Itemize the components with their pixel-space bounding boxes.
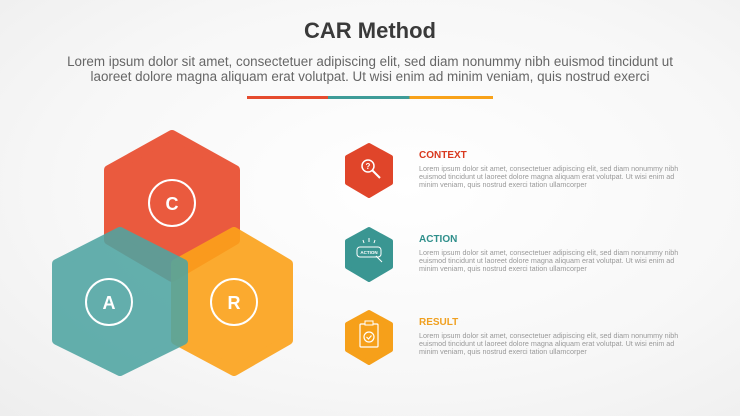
icon: context: ?	[366, 162, 371, 171]
hexagon R: R	[228, 293, 240, 313]
hexagon C: C	[166, 194, 178, 214]
text: result: Lorem ipsum dolor sit amet, consectetuer adipiscing elit, sed diam nonummy nibh euismod tincidunt ut laoreet dolore magna aliquam erat volutpat. Ut wisi enim ad minim veniam, quis nostrud exerci tation ullamcorper	[419, 331, 678, 356]
hexagon A	[57, 232, 183, 371]
text: context: Lorem ipsum dolor sit amet, consectetuer adipiscing elit, sed diam nonummy nibh euismod tincidunt ut laoreet dolore magna aliquam erat volutpat. Ut wisi enim ad minim veniam, quis nostrud exerci tation ullamcorper	[419, 164, 678, 189]
heading: context: CONTEXT	[419, 150, 467, 161]
divider line	[247, 96, 493, 99]
heading: result: RESULT	[419, 317, 458, 328]
heading: action: ACTION	[419, 234, 457, 245]
icon: action	[347, 229, 391, 280]
hexagon A: A	[102, 293, 116, 313]
text: action: Lorem ipsum dolor sit amet, consectetuer adipiscing elit, sed diam nonummy nibh euismod tincidunt ut laoreet dolore magna aliquam erat volutpat. Ut wisi enim ad minim veniam, quis nostrud exerci tation ullamcorper	[419, 248, 678, 273]
subtitle	[67, 54, 673, 84]
subtitle: laoreet dolore magna aliquam erat volutpat. Ut wisi enim ad minim veniam, quis nostrud exerci	[91, 69, 649, 84]
icon: result	[347, 312, 391, 363]
title: CAR Method	[304, 18, 436, 43]
hexagon R	[176, 232, 288, 371]
subtitle: Lorem ipsum dolor sit amet, consectetuer adipiscing elit, sed diam nonummy nibh euismod tincidunt ut	[67, 54, 673, 69]
hexagon C	[109, 135, 235, 277]
icon: context	[347, 145, 391, 196]
icon: action: ACTION	[360, 250, 378, 255]
